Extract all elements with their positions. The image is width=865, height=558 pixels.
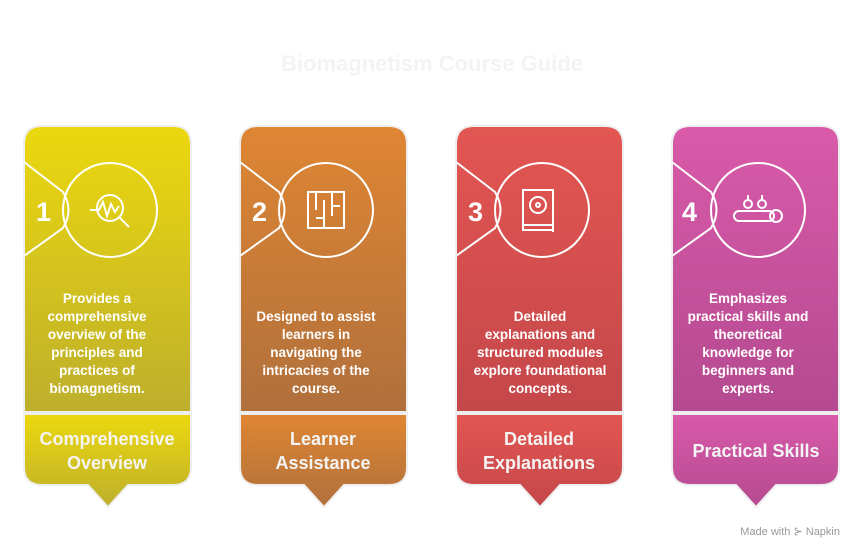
card 4: Practical Skills: Emphasizes [709,291,787,306]
card 2: Learner Assistance: Assistance [275,453,371,473]
card 3: Detailed Explanations: concepts. [508,381,572,396]
card 3: Detailed Explanations: Explanations [483,453,595,473]
card 1: Comprehensive Overview: overview of the [48,327,147,342]
card 2: Learner Assistance: 2 [252,197,267,227]
card 2: Learner Assistance: navigating the [270,345,362,360]
card 3: Detailed Explanations: Detailed [504,429,574,449]
card 1: Comprehensive Overview [24,126,191,507]
card 3: Detailed Explanations [456,126,623,507]
card 4: Practical Skills: experts. [722,381,774,396]
card 3: Detailed Explanations: Detailed [514,309,566,324]
card 1: Comprehensive Overview: principles and [51,345,143,360]
card 2: Learner Assistance: intricacies of the [262,363,370,378]
title: Biomagnetism Course Guide [281,51,583,76]
card 3: Detailed Explanations: explore foundational [474,363,606,378]
card 2: Learner Assistance: Designed to assist [256,309,376,324]
card 1: Comprehensive Overview: Provides a [63,291,132,306]
card 2: Learner Assistance [240,126,407,507]
card 4: Practical Skills: beginners and [702,363,794,378]
card 1: Comprehensive Overview: biomagnetism. [49,381,145,396]
card 1: Comprehensive Overview: Comprehensive [39,429,175,449]
card 4: Practical Skills [672,126,839,507]
card 4: Practical Skills: 4 [682,197,697,227]
card 1: Comprehensive Overview: 1 [36,197,51,227]
card 2: Learner Assistance: learners in [282,327,350,342]
card 4: Practical Skills: practical skills and [688,309,808,324]
footer: made with Napkin: Made with ⊱ Napkin [740,526,840,538]
card 1: Comprehensive Overview: comprehensive [47,309,147,324]
card 1: Comprehensive Overview: practices of [59,363,135,378]
card 3: Detailed Explanations: 3 [468,197,483,227]
card 3: Detailed Explanations: explanations and [485,327,595,342]
card 4: Practical Skills: Practical Skills [692,441,820,461]
card 1: Comprehensive Overview: Overview [67,453,148,473]
card 2: Learner Assistance: course. [292,381,340,396]
card 4: Practical Skills: theoretical [714,327,782,342]
card 4: Practical Skills: knowledge for [702,345,794,360]
card 2: Learner Assistance: Learner [290,429,356,449]
card 3: Detailed Explanations: structured modules [477,345,603,360]
